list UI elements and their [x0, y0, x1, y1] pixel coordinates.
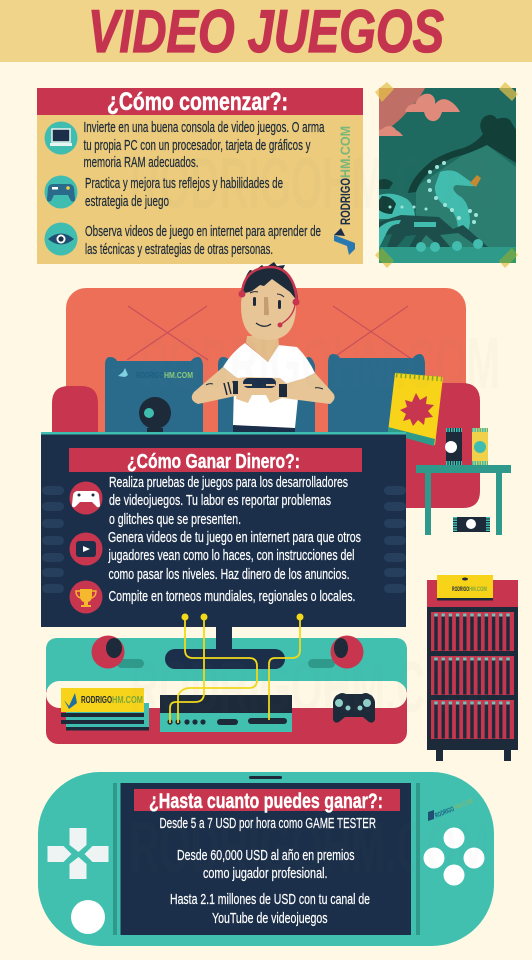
business cards: HM.COM — [112, 695, 143, 706]
logo on console: HM.COM — [453, 798, 474, 812]
text: genera videos: Genera videos de tu juego en internert para que otros — [108, 529, 361, 546]
logo on cushion — [118, 368, 193, 380]
heading: como ganar dinero: ¿Cómo Ganar Dinero?: — [127, 451, 300, 473]
text: pruebas: de videojuegos. Tu labor es reportar problemas — [109, 492, 331, 509]
text: observa — [85, 224, 321, 258]
game console — [160, 695, 292, 732]
heading: como comenzar: ¿Cómo comenzar?: — [107, 88, 288, 116]
cushions — [105, 354, 425, 433]
text: consola: Invierte en una buena consola de video juegos. O arma — [84, 120, 325, 136]
text: reflejos: Practica y mejora tus reflejos y habilidades de — [85, 176, 283, 192]
text: genera videos — [108, 529, 361, 583]
d-pad — [48, 828, 108, 879]
icon: gamepad — [44, 176, 78, 208]
text: pruebas — [109, 474, 348, 528]
side table — [416, 465, 511, 535]
illustration: dragon — [375, 82, 518, 268]
logo on cushion: RODRIGO — [136, 371, 164, 380]
logo: rodrigohm vertical: RODRIGO — [337, 178, 353, 225]
logo: rodrigohm vertical — [334, 126, 355, 255]
handheld console — [38, 772, 494, 946]
monitor panel: como ganar dinero — [41, 432, 406, 627]
TV stand console — [46, 627, 407, 744]
watermarks — [130, 144, 500, 888]
text: observa: las técnicas y estrategias de otras personas. — [85, 242, 273, 258]
webcam — [139, 397, 171, 436]
text: youtube: Hasta 2.1 millones de USD con tu canal de — [170, 891, 370, 908]
text: pruebas: o glitches que se presenten. — [109, 511, 241, 528]
icon: video — [70, 532, 102, 566]
screen — [120, 783, 411, 935]
text: game tester: Desde 5 a 7 USD por hora como GAME TESTER — [160, 815, 376, 832]
text: reflejos — [85, 176, 283, 210]
logo on cushion: HM.COM — [164, 371, 193, 380]
shelf logo: HM.COM — [469, 587, 487, 593]
sofa — [52, 288, 480, 508]
gamepad — [333, 693, 375, 723]
panel: como comenzar — [37, 88, 363, 264]
icon: controller — [70, 482, 102, 514]
text: premios: como jugador profesional. — [203, 865, 328, 882]
snack cans — [445, 428, 488, 465]
logo on console — [428, 798, 474, 821]
header band — [0, 0, 532, 65]
text: consola — [84, 120, 325, 171]
text: consola: memoria RAM adecuados. — [84, 155, 198, 171]
tape corners — [375, 82, 518, 268]
monitor base — [165, 627, 285, 669]
icon: trophy — [70, 580, 102, 614]
icon: laptop — [44, 122, 78, 154]
text: youtube — [170, 891, 370, 927]
text: premios: Desde 60,000 USD al año en premios — [177, 847, 354, 864]
logo on console: RODRIGO — [434, 806, 456, 820]
business cards: RODRIGO — [81, 695, 112, 706]
shelf logo — [437, 575, 493, 600]
joystick — [71, 900, 105, 934]
text: pruebas: Realiza pruebas de juegos para los desarrolladores — [109, 474, 348, 491]
buttons — [424, 828, 484, 886]
text: compite: Compite en torneos mundiales, regionales o locales. — [108, 588, 356, 605]
heading: hasta cuanto: ¿Hasta cuanto puedes ganar?: — [149, 790, 383, 813]
icon: eye — [44, 222, 78, 256]
text: premios — [177, 847, 354, 882]
text: youtube: YouTube de videojuegos — [212, 910, 328, 927]
snack on floor — [453, 517, 490, 532]
logo: rodrigohm vertical: HM.COM — [337, 126, 353, 178]
chip bag — [388, 373, 443, 446]
text: genera videos: como pasar los niveles. Haz dinero de los anuncios. — [108, 566, 350, 583]
shelf logo: RODRIGO — [452, 587, 469, 593]
person — [192, 262, 335, 433]
text: observa: Observa videos de juego en internet para aprender de — [85, 224, 321, 240]
cables — [170, 614, 304, 723]
shelf — [427, 575, 518, 761]
business cards — [61, 688, 149, 730]
speakers — [92, 636, 364, 668]
text: genera videos: jugadores vean como lo haces, con instrucciones del — [108, 547, 354, 564]
text: reflejos: estrategia de juego — [85, 194, 169, 210]
text: consola: tu propia PC con un procesador, tarjeta de gráficos y — [84, 138, 311, 154]
